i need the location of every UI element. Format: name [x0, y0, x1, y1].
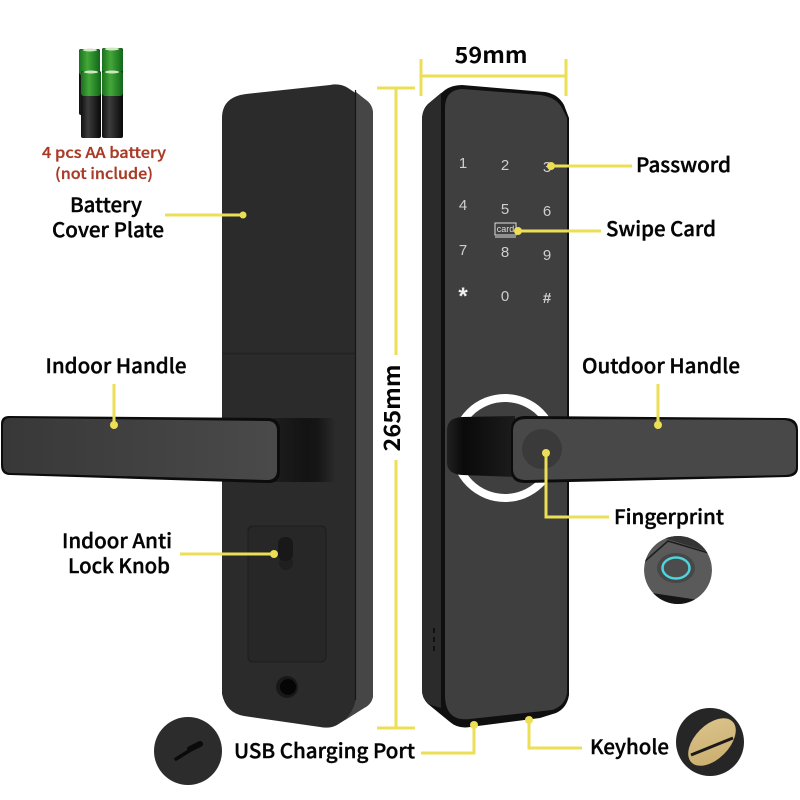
battery cover plate seam: [222, 352, 355, 354]
label: indoor handle: [46, 350, 186, 429]
label: password: [547, 149, 731, 178]
keypad numbers: 1: [459, 155, 467, 172]
label: keyhole: [525, 716, 669, 760]
keypad numbers: 5: [501, 201, 509, 218]
indoor lock body: [222, 84, 373, 728]
label: swipe card: Swipe Card: [606, 213, 716, 242]
keypad numbers: 0: [501, 288, 509, 305]
inset: keyhole: [676, 708, 745, 776]
battery note: (not include): [55, 163, 153, 184]
dimension: height 265mm: 265mm: [375, 364, 407, 452]
label: indoor handle: Indoor Handle: [46, 350, 186, 379]
label: battery cover plate: Battery: [70, 189, 142, 218]
keypad numbers: #: [543, 290, 552, 307]
keypad numbers: 9: [543, 247, 551, 264]
keypad numbers: 2: [501, 157, 509, 174]
label: battery cover plate: [52, 189, 246, 243]
card icon: card: [497, 224, 514, 234]
dimension: width 59mm: 59mm: [454, 38, 528, 70]
LED ring: [455, 398, 555, 498]
label: USB charging port: [234, 721, 478, 764]
label: indoor anti lock knob: Indoor Anti: [62, 525, 172, 554]
keypad numbers: [458, 155, 552, 310]
outdoor lock body: [422, 85, 569, 727]
keypad numbers: 8: [501, 244, 509, 261]
label: indoor anti lock knob: Lock Knob: [68, 550, 170, 579]
label: fingerprint: [542, 449, 724, 530]
label: fingerprint: Fingerprint: [614, 501, 724, 530]
indoor handle: [1, 416, 336, 483]
fingerprint sensor: [522, 429, 562, 469]
label: indoor anti lock knob: [62, 525, 278, 579]
keypad numbers: 6: [543, 203, 551, 220]
card icon: [495, 223, 516, 237]
inset: fingerprint sensor: [644, 536, 712, 604]
keypad numbers: 7: [459, 242, 467, 259]
label: swipe card: [514, 213, 716, 242]
keypad panel: [445, 89, 567, 719]
icon: AA batteries: [79, 48, 123, 138]
keypad numbers: 3: [543, 159, 551, 176]
indoor lock plate: [248, 526, 326, 662]
label: outdoor handle: [582, 350, 740, 429]
outdoor handle: [447, 416, 798, 483]
label: battery cover plate: Cover Plate: [52, 214, 164, 243]
label: keyhole: Keyhole: [590, 731, 669, 760]
keypad numbers: 4: [459, 197, 467, 214]
inset: USB port: [154, 717, 222, 785]
battery note: [42, 142, 166, 184]
label: USB charging port: USB Charging Port: [234, 735, 415, 764]
side vents: [433, 628, 435, 651]
bottom screw hole: [276, 676, 298, 698]
label: outdoor handle: Outdoor Handle: [582, 350, 740, 379]
keypad numbers: *: [458, 283, 468, 310]
anti lock knob: [278, 537, 293, 570]
label: password: Password: [636, 149, 731, 178]
battery note: 4 pcs AA battery: [42, 142, 166, 163]
